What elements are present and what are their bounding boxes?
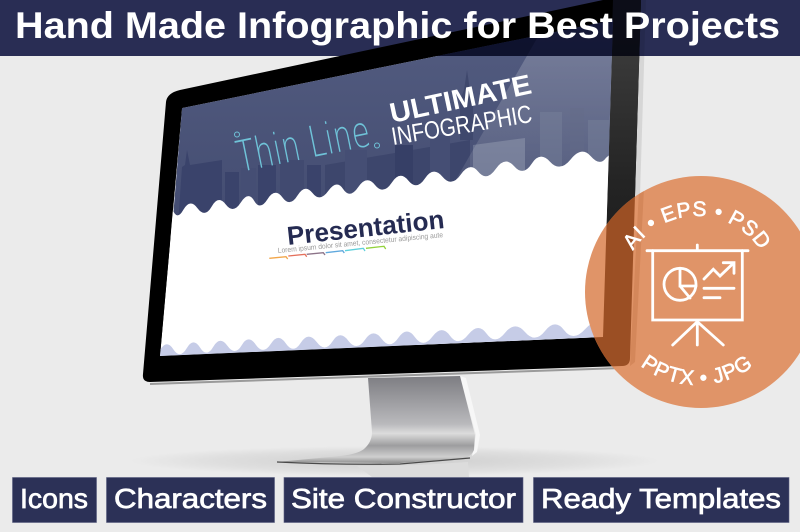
screen heading: Ultimate: ULTIMATE <box>387 69 534 129</box>
glass reflection <box>456 20 613 180</box>
button: Icons: Icons <box>20 483 88 514</box>
coloured tab lines <box>269 246 386 259</box>
screen heading: Thin Line <box>232 107 380 183</box>
button: Site Constructor: Site Constructor <box>291 483 516 514</box>
monitor edge highlight <box>630 0 646 360</box>
button: Characters: Characters <box>114 483 267 514</box>
icon: presentation board <box>647 245 748 345</box>
stand shadow <box>130 446 660 476</box>
monitor <box>143 0 646 477</box>
right bezel <box>603 0 641 366</box>
button: Site Constructor <box>284 478 523 522</box>
format badge <box>585 176 800 408</box>
monitor bottom shadow <box>150 368 622 384</box>
monitor stand <box>277 376 480 477</box>
top banner <box>0 0 800 56</box>
screen heading: Infographic: INFOGRAPHIC <box>389 100 534 151</box>
button: Icons <box>12 478 96 522</box>
wave divider bottom <box>160 324 594 356</box>
badge text bottom: PPTX • JPG <box>641 354 752 386</box>
slide subtitle: Lorem ipsum dolor sit amet, consectetur adipiscing aute <box>277 230 443 255</box>
bezel seen through badge <box>594 191 644 366</box>
city photo <box>174 20 613 216</box>
wave divider top <box>165 150 615 345</box>
button: Ready Templates <box>534 478 789 522</box>
screen <box>160 20 613 356</box>
badge text top: AI • EPS • PSD <box>624 201 770 252</box>
icon: pie chart <box>664 268 696 300</box>
icon: trend arrow <box>704 263 734 279</box>
slide title: Presentation: Presentation <box>285 204 446 251</box>
button: Ready Templates: Ready Templates <box>541 483 781 514</box>
button: Characters <box>106 478 274 522</box>
monitor bezel <box>143 0 641 382</box>
title: Hand Made Infographic for Best Projects <box>15 4 780 46</box>
screen heading: Thin Line: Thin Line <box>232 107 374 183</box>
